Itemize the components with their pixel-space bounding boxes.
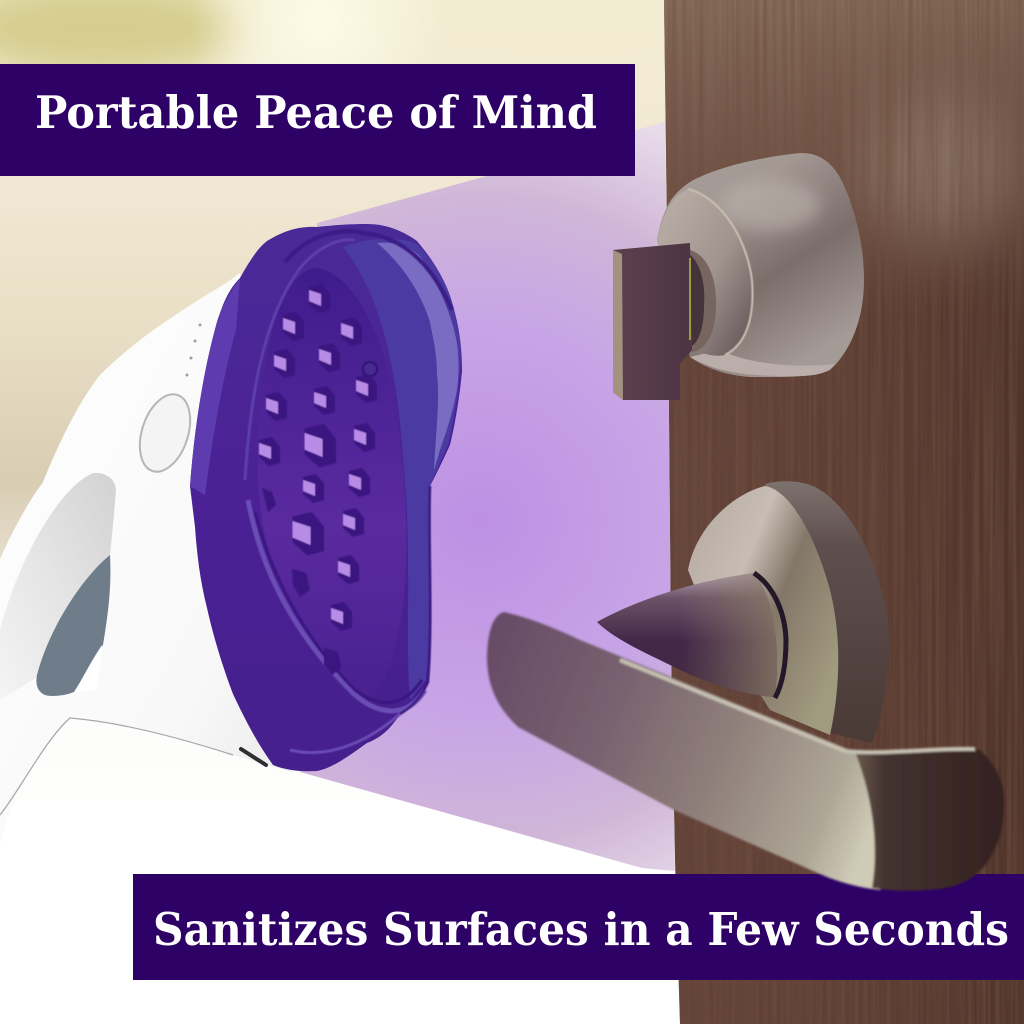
thumb turn neck	[690, 250, 716, 352]
background: blurred room	[0, 0, 680, 1024]
ribbon rim lines	[245, 231, 452, 753]
banner: Sanitizes Surfaces in a Few Seconds	[133, 874, 1024, 980]
dark blue inner wall	[343, 239, 461, 700]
thumb turn	[613, 243, 692, 400]
power button	[131, 388, 199, 478]
lever arm	[487, 612, 1004, 891]
lever handle	[487, 481, 1004, 891]
deadbolt lock	[613, 153, 864, 400]
indicator dots	[186, 324, 202, 376]
lock housing	[657, 153, 864, 377]
cone	[597, 573, 777, 697]
usb port	[241, 749, 266, 765]
inner LED face	[258, 268, 406, 698]
lock face cup	[657, 189, 753, 356]
rose plate side	[765, 481, 889, 743]
handle grip opening	[36, 555, 110, 696]
banner: Portable Peace of Mind	[0, 64, 635, 176]
lens outer shell	[190, 224, 462, 771]
lever top highlight	[620, 660, 975, 752]
white body	[0, 273, 292, 845]
handle hollow	[0, 473, 116, 700]
LED cells	[259, 284, 377, 675]
heading: top: Portable Peace of Mind	[35, 86, 597, 139]
left step band	[190, 278, 240, 495]
UV sanitizer device	[0, 224, 462, 845]
light blue inner wall	[377, 243, 458, 470]
purple UV light beam	[300, 122, 675, 871]
lever end cap	[855, 749, 1004, 891]
rose plate face	[688, 486, 838, 735]
door	[664, 0, 1024, 1024]
